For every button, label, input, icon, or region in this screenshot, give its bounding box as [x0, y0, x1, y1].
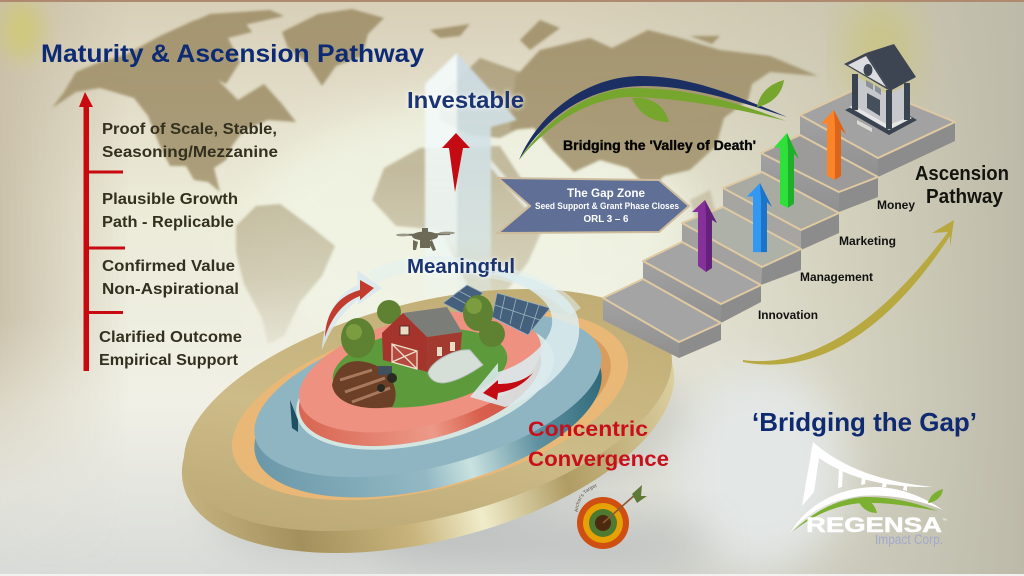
world map — [52, 9, 818, 344]
trees — [341, 295, 505, 358]
swoosh: bridging the valley of death — [519, 76, 787, 160]
banner: the gap zone: ORL 3 – 6 — [584, 213, 629, 225]
investable label: Investable — [407, 87, 524, 113]
south america — [236, 204, 335, 344]
label: plausible growth: Plausible Growth — [102, 191, 238, 208]
label: marketing: Marketing — [839, 236, 896, 248]
asia — [510, 30, 818, 190]
europe — [458, 57, 520, 140]
solar panels — [443, 285, 550, 335]
label: seasoning: Seasoning/Mezzanine — [102, 144, 278, 161]
maturity labels — [99, 121, 278, 369]
outer gold ring — [155, 245, 701, 576]
logo bridge tower and cable — [802, 442, 933, 506]
icon: archer's target — [574, 484, 647, 549]
greenland — [282, 9, 384, 86]
logo: regensa — [790, 442, 947, 547]
concentric rings — [155, 245, 701, 576]
north america — [52, 16, 296, 192]
ascension pathway label — [915, 163, 1009, 208]
banner: the gap zone: Seed Support & Grant Phase Closes — [535, 201, 679, 211]
arctic islands — [160, 10, 720, 50]
step 5 — [761, 135, 878, 212]
label: non-aspirational: Non-Aspirational — [102, 281, 239, 298]
barn — [382, 307, 462, 372]
arrow: blue — [747, 183, 772, 252]
label: empirical support: Empirical Support — [99, 352, 239, 369]
africa — [371, 144, 542, 292]
step 2 — [643, 242, 761, 323]
label: innovation: Innovation — [758, 310, 818, 322]
oceania — [690, 190, 716, 217]
logo leaves — [857, 489, 943, 513]
valley of death label: Bridging the 'Valley of Death' — [563, 138, 756, 153]
colored step arrows — [692, 110, 846, 272]
logo: regensa: ™ — [942, 518, 947, 524]
label: confirmed value: Confirmed Value — [102, 258, 235, 275]
gold curved arrow — [743, 220, 954, 365]
leaf — [632, 98, 669, 122]
meaningful label: Meaningful — [407, 256, 515, 278]
blue ring — [237, 282, 619, 529]
label: path replicable: Path - Replicable — [102, 214, 234, 231]
arrow: purple — [692, 200, 717, 272]
large translucent up arrow — [425, 53, 530, 300]
tractor — [377, 366, 397, 392]
label: management: Management — [800, 272, 873, 284]
red maturity axis arrow — [79, 92, 125, 371]
meaningful label: Meaningful — [407, 256, 515, 278]
drone — [396, 228, 455, 251]
curved red arrow left — [325, 280, 374, 337]
label: proof of scale: Proof of Scale, Stable, — [102, 121, 277, 138]
banner: the gap zone: The Gap Zone — [567, 188, 645, 200]
title: Maturity & Ascension Pathway — [41, 40, 424, 68]
concentric convergence label — [528, 418, 669, 471]
logo subtitle: Impact Corp. — [875, 532, 943, 547]
spiral ribbon top — [372, 263, 575, 312]
arrow: orange — [821, 110, 846, 180]
icon: bank building — [844, 44, 917, 135]
spiral ribbon left — [322, 270, 382, 350]
farm — [328, 285, 550, 418]
leaf — [757, 80, 784, 107]
logo deck — [790, 487, 943, 533]
concentric convergence label: Convergence — [528, 448, 669, 471]
red up arrow — [442, 133, 470, 192]
step 4 — [723, 172, 839, 250]
logo wordmark: REGENSA — [806, 514, 942, 537]
curved red arrow right — [483, 373, 533, 400]
stair labels — [758, 200, 916, 322]
ring shadow — [199, 329, 701, 576]
banner: the gap zone — [498, 178, 689, 233]
logo green swoosh — [792, 497, 938, 532]
label: money: Money — [877, 200, 916, 212]
step 1 — [603, 279, 721, 358]
pink ring — [286, 290, 554, 468]
ground — [328, 318, 512, 418]
label: clarified outcome: Clarified Outcome — [99, 329, 242, 346]
concentric convergence label: Concentric — [528, 418, 648, 441]
step 6 platform — [800, 85, 955, 177]
greenhouse — [428, 350, 483, 383]
spiral ribbon right — [470, 270, 579, 407]
bridging the gap heading: ‘Bridging the Gap’ — [752, 407, 977, 437]
step 3 — [682, 207, 801, 285]
arrow: green — [774, 133, 799, 208]
staircase — [603, 85, 955, 358]
ascension pathway label: Pathway — [926, 186, 1004, 208]
icon: archer's target: Archer's Target — [574, 484, 597, 512]
investable label: Investable — [407, 87, 524, 113]
ascension pathway label: Ascension — [915, 163, 1009, 185]
